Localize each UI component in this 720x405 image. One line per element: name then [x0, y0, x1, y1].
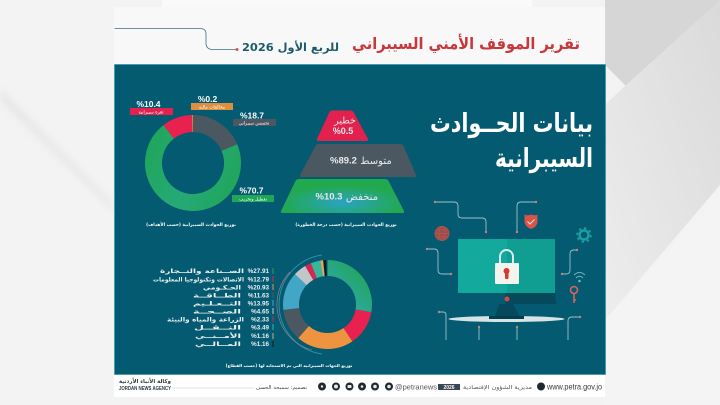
label: financial fraud 0.2: %0.2 [198, 94, 217, 104]
connector lines [427, 202, 580, 340]
tier: medium [300, 144, 416, 177]
year badge: 2026 [443, 385, 455, 391]
label: cyber attack 18.7 [233, 110, 276, 126]
illustration: secure computer [426, 201, 591, 340]
web icon [537, 382, 545, 390]
agency logo text: JORDAN NEWS AGENCY [119, 386, 172, 392]
year badge [438, 384, 460, 391]
main teal panel [114, 64, 606, 374]
list: sectors and percentages: الاتصالات وتكنولوجيا المعلومات [153, 276, 244, 284]
monitor [458, 239, 555, 293]
white report card [114, 7, 605, 397]
tier: low: منخفض [346, 192, 378, 203]
title: تقرير الموقف الأمني السيبراني [352, 34, 580, 54]
social icons [318, 382, 393, 390]
label: cyber attack 18.7: %18.7 [240, 110, 264, 120]
designer credit: تصميم: سميحة الحسن [256, 385, 308, 391]
label: financial fraud 0.2: مخالفات مالية [199, 106, 226, 110]
list: sectors and percentages: %20.93 [248, 284, 269, 292]
label: exploitation 70.7 [232, 186, 274, 202]
list: sectors and percentages: الأمــنــي [195, 332, 241, 340]
heading: cyber incidents data [430, 109, 593, 174]
website: www.petra.gov.jo [546, 382, 602, 392]
agency logo text: وكالة الأنباء الأردنية [119, 377, 172, 385]
heading: cyber incidents data: بيانات الحــوادث [430, 109, 593, 139]
list: sectors and percentages: النــقــل [194, 324, 241, 332]
tier: critical [317, 110, 368, 141]
padlock [495, 250, 519, 284]
label: financial fraud 0.2 [191, 94, 233, 110]
footer background [114, 375, 605, 397]
label: cyber breach 10.4: %10.4 [136, 99, 161, 109]
tier: medium: متوسط [360, 156, 392, 167]
label: cyber breach 10.4: ثغرة سيبرانية [139, 110, 164, 116]
tier: critical: خطير [333, 116, 356, 126]
icon: shield [524, 214, 538, 229]
list: sectors and percentages: %11.63 [248, 292, 269, 300]
caption: sector donut: توزيع الجهات السيبرانية التي تم الاستجابة لها (حسب القطاع) [226, 363, 353, 368]
label: cyber breach 10.4 [130, 99, 173, 116]
tier: low [281, 179, 404, 213]
list: sectors and percentages: %3.49 [251, 324, 269, 332]
heading: cyber incidents data: السيبرانية [495, 144, 593, 174]
list: sectors and percentages: %1.16 [251, 333, 269, 340]
list: sectors and percentages: %13.95 [248, 300, 269, 308]
list: sectors and percentages: الصــحــة [193, 308, 241, 316]
directorate: مديرية الشؤون الإقتصادية [463, 385, 532, 391]
list: sectors and percentages: الحـكـومي [203, 284, 241, 292]
list colour ticks [272, 268, 274, 347]
tier: critical: %0.5 [333, 126, 353, 136]
list: sectors and percentages: %2.33 [251, 316, 269, 324]
label: exploitation 70.7: %70.7 [239, 186, 264, 196]
list: sectors and percentages: %27.91 [248, 268, 269, 275]
caption: توزيع الحوادث السيبرانية (حسب درجة الخطورة) [295, 222, 397, 228]
tier: medium: %89.2 [330, 156, 357, 166]
icon: wifi [574, 272, 585, 282]
list: sectors and percentages: المــالــي [195, 341, 241, 348]
subtitle: quarter: للربع الأول 2026 [242, 40, 339, 54]
label: cyber attack 18.7: تحسس سيبراني [239, 122, 270, 126]
chart: donut by sector [276, 253, 379, 356]
icon: globe [435, 226, 449, 240]
list: sectors and percentages: الطــاقــة [193, 292, 241, 300]
list: sectors and percentages: الصــناعة والتــجارة [160, 268, 244, 275]
tier: low: %10.3 [316, 192, 342, 202]
list: sectors and percentages: %12.79 [248, 276, 269, 284]
list: sectors and percentages: %1.16 [251, 341, 269, 348]
chart: donut by target [130, 94, 276, 228]
footer [119, 377, 602, 392]
list: sectors and percentages: %4.65 [251, 308, 269, 316]
handle: @petranews [395, 382, 437, 392]
list: sectors and percentages: التــعـلـيم [193, 300, 241, 308]
list: sectors and percentages [153, 268, 269, 348]
icon: key [570, 286, 578, 303]
header connector line [114, 28, 238, 51]
label: exploitation 70.7: تعطيل وتخريب [239, 198, 268, 202]
caption: توزيع الحوادث السيبرانية (حسب الأهداف) [146, 221, 236, 228]
list: sectors and percentages: الزراعة والمياه والبيئة [167, 316, 244, 324]
chart: severity pyramid [281, 110, 416, 228]
agency logo text [119, 377, 172, 392]
icon: gear [577, 228, 591, 242]
